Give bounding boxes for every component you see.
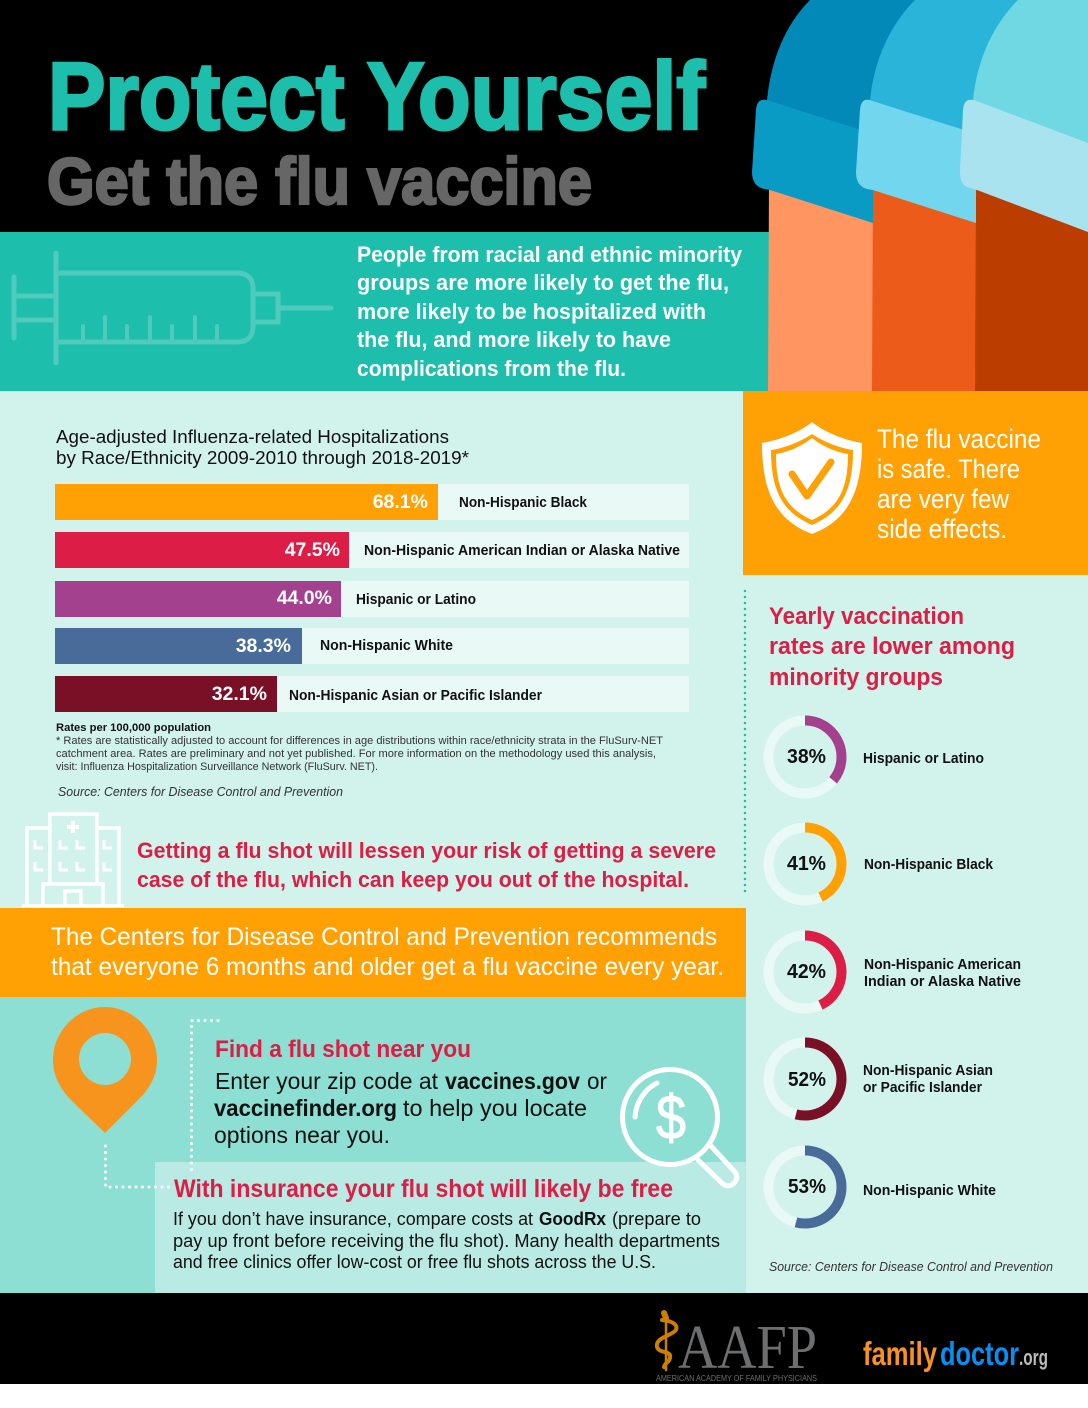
- text block: find a flu shot: vaccinefinder.org: [214, 1095, 397, 1121]
- bar: Non-Hispanic White: [55, 628, 689, 664]
- heading: yearly vaccination: minority groups: [769, 664, 943, 691]
- text: hospital callout: case of the flu, which can keep you out of the hospital.: [137, 867, 689, 892]
- bar: Asian or Pacific Islander: 32.1%: [212, 683, 267, 705]
- text block: find a flu shot: or: [587, 1068, 607, 1094]
- text block: intro: [357, 242, 742, 381]
- logo: AAFP: AMERICAN ACADEMY OF FAMILY PHYSICIANS: [656, 1374, 817, 1383]
- text block: intro: the flu, and more likely to have: [357, 327, 671, 352]
- logo: familydoctor.org: doctor: [940, 1335, 1019, 1372]
- bar: American Indian or Alaska Native: [55, 532, 689, 568]
- heading: insurance: With insurance your flu shot will likely be free: [174, 1175, 673, 1203]
- logo: familydoctor.org: family: [863, 1335, 938, 1372]
- bar: Non-Hispanic White: Non-Hispanic White: [320, 638, 453, 654]
- donut: Asian or Pacific Islander 52%: Non-Hispanic Asian: [863, 1063, 993, 1079]
- heading: bar chart title: Age-adjusted Influenza-related Hospitalizations: [56, 427, 449, 447]
- bar: Non-Hispanic Black: 68.1%: [373, 491, 428, 513]
- heading: yearly vaccination: rates are lower among: [769, 633, 1015, 660]
- bar: Non-Hispanic Black: Non-Hispanic Black: [459, 495, 588, 511]
- donut: American Indian or Alaska Native 42%: 42%: [787, 961, 826, 983]
- icon: shield with check: [762, 422, 862, 534]
- bar: American Indian or Alaska Native: 47.5%: [285, 539, 340, 561]
- heading: bar chart title: [56, 427, 469, 468]
- donut: American Indian or Alaska Native 42%: [768, 936, 1021, 1008]
- text: vaccine safety: are very few: [877, 484, 1009, 514]
- donut: Non-Hispanic Black 41%: Non-Hispanic Black: [864, 857, 994, 873]
- donut: Asian or Pacific Islander 52%: [768, 1042, 993, 1116]
- bar: Hispanic or Latino: Hispanic or Latino: [356, 592, 476, 608]
- text block: find a flu shot: Enter your zip code at: [215, 1068, 439, 1094]
- donut: American Indian or Alaska Native 42%: Indian or Alaska Native: [864, 974, 1021, 990]
- donut: Asian or Pacific Islander 52%: or Pacific Islander: [863, 1080, 982, 1096]
- panel: CDC recommendation: The Centers for Disease Control and Prevention recommends: [51, 923, 717, 951]
- icon: magnifying glass with dollar: $: [656, 1084, 686, 1153]
- title: Protect Yourself: [48, 43, 706, 150]
- donut: Non-Hispanic White 53%: [768, 1150, 996, 1224]
- bar: Non-Hispanic White: 38.3%: [236, 635, 291, 657]
- logo: familydoctor.org: .org: [1019, 1345, 1048, 1370]
- panel: flu vaccine is safe: [743, 391, 1088, 575]
- panel: black header background: [0, 0, 1088, 232]
- text block: chart footnote: catchment area. Rates are preliminary and not yet published. For more information on the methodology used this analysis,: [56, 748, 656, 760]
- bar: American Indian or Alaska Native: Non-Hispanic American Indian or Alaska Native: [364, 543, 680, 559]
- text block: insurance: GoodRx: [539, 1208, 607, 1229]
- text block: chart footnote: Rates per 100,000 population: [56, 722, 211, 734]
- bar chart: [55, 484, 689, 712]
- heading: bar chart title: by Race/Ethnicity 2009-2010 through 2018-2019*: [56, 448, 469, 468]
- panel: CDC recommendation: that everyone 6 months and older get a flu vaccine every year.: [51, 953, 724, 981]
- bar: Hispanic or Latino: 44.0%: [277, 587, 332, 609]
- heading: find a flu shot: Find a flu shot near you: [215, 1036, 471, 1063]
- heading: yearly vaccination: [769, 603, 1015, 691]
- connector: dotted path from pin: [106, 1146, 170, 1187]
- text block: find a flu shot: [214, 1068, 607, 1148]
- donut: Hispanic or Latino 38%: [768, 720, 984, 794]
- text block: insurance: and free clinics offer low-cost or free flu shots across the U.S.: [173, 1251, 656, 1272]
- text block: find a flu shot: to help you locate: [403, 1095, 587, 1121]
- text: hospital callout: Getting a flu shot will lessen your risk of getting a severe: [137, 838, 716, 863]
- illustration: vaccine vials: [752, 0, 1088, 391]
- logo: AAFP: AAFP: [678, 1314, 817, 1382]
- text block: intro: People from racial and ethnic minority: [357, 242, 742, 267]
- bar: Asian or Pacific Islander: [55, 676, 689, 712]
- connector: dotted path from heading: [192, 1020, 218, 1175]
- logo: familydoctor.org: [863, 1335, 1048, 1372]
- heading: yearly vaccination: Yearly vaccination: [769, 603, 964, 630]
- divider: dotted teal line: [744, 591, 746, 895]
- text block: insurance: (prepare to: [612, 1208, 701, 1229]
- text: vaccine safety: is safe. There: [877, 454, 1020, 484]
- donut: Non-Hispanic Black 41%: 41%: [787, 853, 826, 875]
- source: vaccination rates: Source: Centers for Disease Control and Prevention: [769, 1259, 1053, 1274]
- panel: find a flu shot: [0, 997, 746, 1293]
- text block: intro: groups are more likely to get the flu,: [357, 270, 729, 295]
- panel: insurance: [155, 1162, 746, 1293]
- text block: chart footnote: * Rates are statistically adjusted to account for differences in age distributions within race/ethnicity strata in the FluSurv-NET: [56, 735, 663, 747]
- text block: insurance: [173, 1208, 720, 1272]
- text block: insurance: If you don’t have insurance, compare costs at: [173, 1208, 533, 1229]
- text: vaccine safety: [877, 424, 1041, 544]
- donut: Hispanic or Latino 38%: 38%: [787, 746, 826, 768]
- text block: intro: more likely to be hospitalized with: [357, 299, 706, 324]
- panel: intro band: [0, 232, 769, 391]
- text: vaccine safety: side effects.: [877, 514, 1007, 544]
- panel: CDC recommendation: [0, 908, 746, 997]
- bar: Hispanic or Latino: [55, 581, 689, 617]
- text: vaccine safety: The flu vaccine: [877, 424, 1041, 454]
- icon: syringe: [14, 253, 331, 363]
- text block: find a flu shot: options near you.: [214, 1122, 390, 1148]
- donut: Asian or Pacific Islander 52%: 52%: [788, 1069, 826, 1091]
- text block: intro: complications from the flu.: [357, 356, 626, 381]
- panel: main light background: [0, 391, 1088, 1293]
- subtitle: Get the flu vaccine: [47, 144, 592, 218]
- icon: hospital: [22, 814, 124, 906]
- text: hospital callout: [137, 838, 716, 892]
- donut: Non-Hispanic White 53%: 53%: [788, 1176, 826, 1198]
- donut: American Indian or Alaska Native 42%: Non-Hispanic American: [864, 957, 1021, 973]
- icon: magnifying glass with dollar: [622, 1070, 737, 1186]
- donut: Non-Hispanic Black 41%: [768, 828, 994, 900]
- bar: Non-Hispanic Black: [55, 484, 689, 520]
- donut: Non-Hispanic White 53%: Non-Hispanic White: [863, 1183, 996, 1199]
- text block: chart footnote: [56, 722, 663, 773]
- icon: location pin: [53, 1007, 157, 1133]
- panel: footer: [0, 1293, 1088, 1384]
- bar: Asian or Pacific Islander: Non-Hispanic Asian or Pacific Islander: [289, 688, 542, 704]
- donut: Hispanic or Latino 38%: Hispanic or Latino: [863, 751, 984, 767]
- text block: chart footnote: visit: Influenza Hospitalization Surveillance Network (FluSurv. NET).: [56, 761, 378, 773]
- text block: find a flu shot: vaccines.gov: [445, 1068, 580, 1094]
- text block: insurance: pay up front before receiving the flu shot). Many health departments: [173, 1230, 720, 1251]
- source: bar chart: Source: Centers for Disease Control and Prevention: [58, 784, 343, 799]
